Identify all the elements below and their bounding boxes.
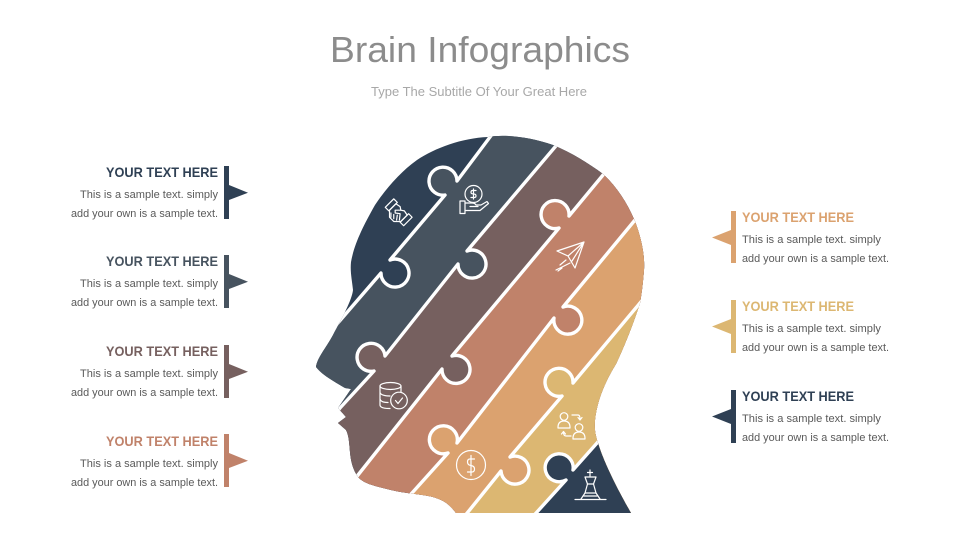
title: Brain Infographics	[330, 29, 630, 70]
callout: left item 1	[71, 164, 248, 220]
callout: left item 2: add your own is a sample text.	[71, 297, 218, 309]
callout: left item 2: This is a sample text. simply	[80, 278, 218, 290]
icon: hand holding coin	[460, 186, 488, 214]
icon: paper plane	[556, 242, 584, 271]
callout: left item 4: YOUR TEXT HERE	[106, 433, 218, 449]
callout: left item 3	[71, 343, 248, 399]
icon: dollar coin	[456, 450, 486, 480]
head puzzle silhouette	[316, 136, 644, 513]
subtitle: Type The Subtitle Of Your Great Here	[371, 85, 587, 99]
callout: left item 2	[71, 253, 248, 309]
callout: left item 1: This is a sample text. simply	[80, 189, 218, 201]
callout: right item 2	[712, 298, 889, 354]
callout: left item 4	[71, 433, 248, 489]
callout: right item 2: YOUR TEXT HERE	[742, 298, 854, 314]
callout: left item 1: YOUR TEXT HERE	[106, 164, 218, 180]
callout: right item 3: add your own is a sample text.	[742, 432, 889, 444]
callout: left item 1: add your own is a sample text.	[71, 208, 218, 220]
callout: left item 4: This is a sample text. simply	[80, 458, 218, 470]
icon: people swap	[558, 413, 585, 439]
icon: database check	[380, 382, 407, 409]
callout: right item 3: YOUR TEXT HERE	[742, 388, 854, 404]
callout: right item 1	[712, 209, 889, 265]
callout: right item 2: add your own is a sample text.	[742, 342, 889, 354]
callout: right item 3: This is a sample text. simply	[742, 413, 881, 425]
callout: left item 3: This is a sample text. simply	[80, 368, 218, 380]
callout: right item 3	[712, 388, 889, 444]
callout: left item 3: add your own is a sample text.	[71, 387, 218, 399]
callout: left item 3: YOUR TEXT HERE	[106, 343, 218, 359]
icon: chess king	[575, 470, 606, 500]
callout: left item 4: add your own is a sample text.	[71, 477, 218, 489]
callout: right item 1: This is a sample text. simply	[742, 234, 881, 246]
callout: left item 2: YOUR TEXT HERE	[106, 253, 218, 269]
callout: right item 2: This is a sample text. simply	[742, 323, 881, 335]
icon: handshake	[382, 199, 412, 229]
callout: right item 1: add your own is a sample text.	[742, 253, 889, 265]
callout: right item 1: YOUR TEXT HERE	[742, 209, 854, 225]
